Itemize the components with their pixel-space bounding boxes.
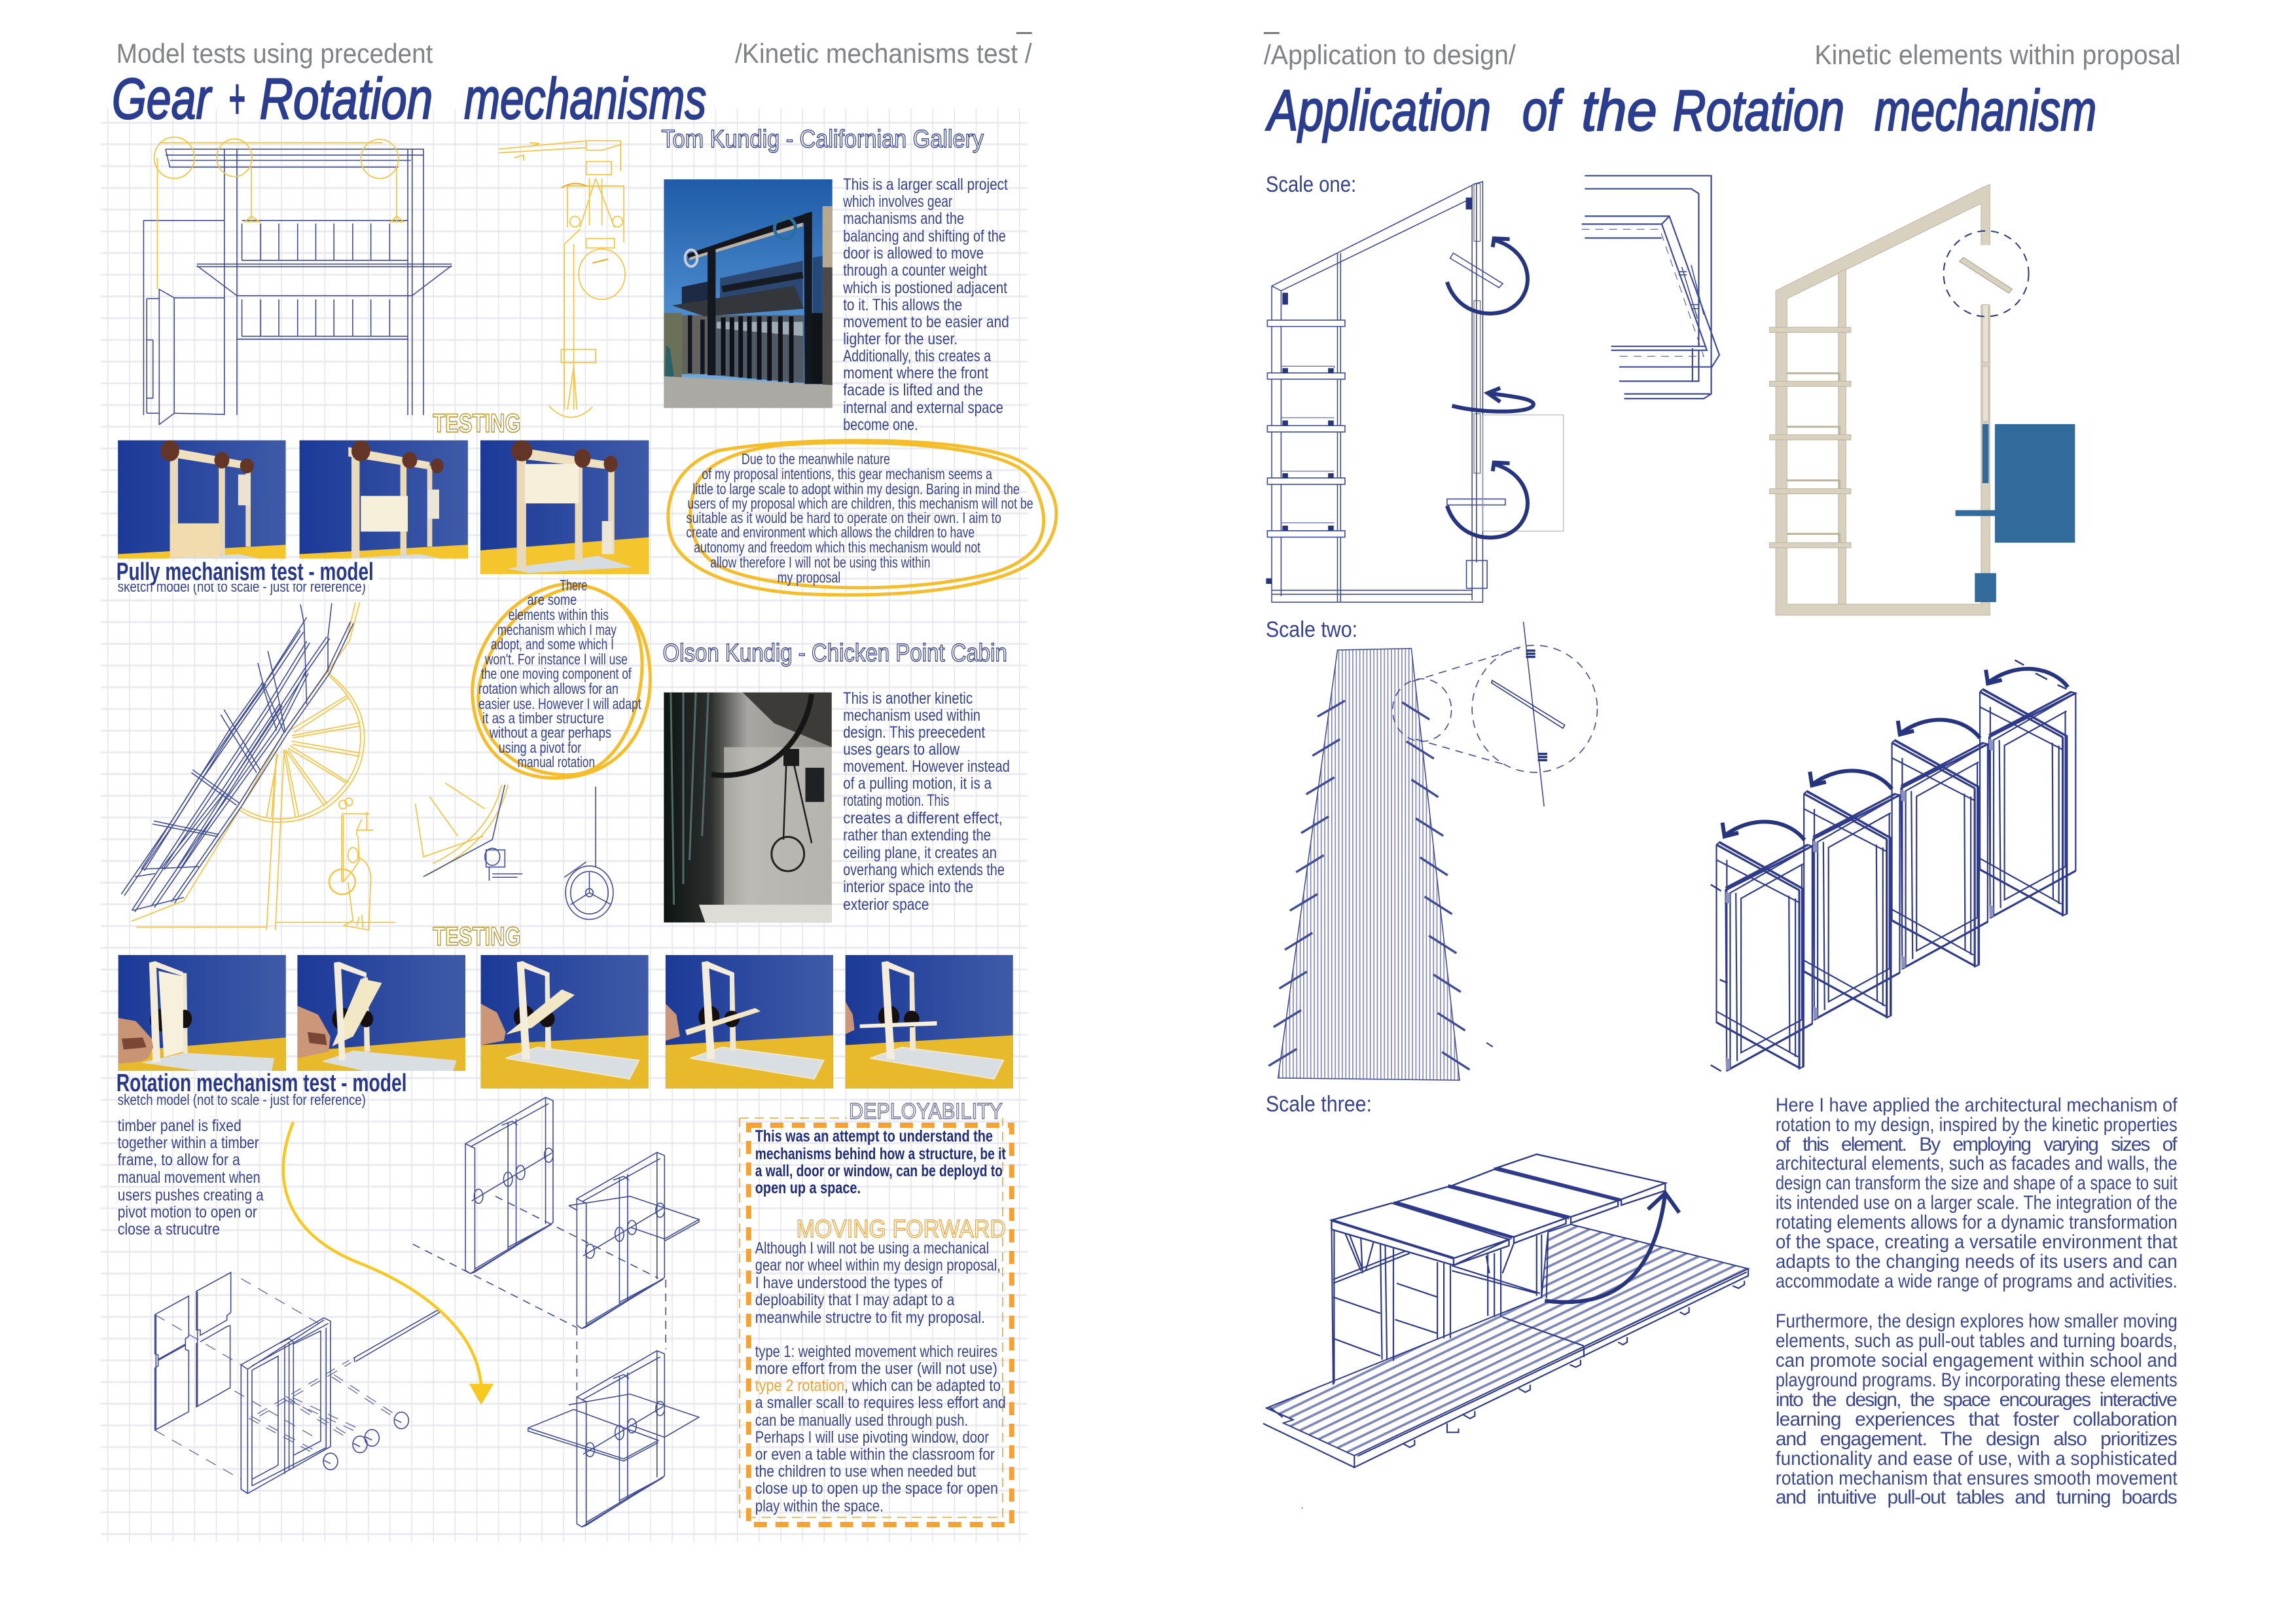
text: moving forward notes: more effort from the user (will not use) (755, 1360, 997, 1378)
text: timber panel note: timber panel is fixed (118, 1117, 242, 1135)
navy lattice (121, 604, 353, 912)
photo: Californian Gallery (664, 179, 833, 408)
title: Application of the Rotation mechanism: of (1522, 79, 1564, 143)
text: Chicken Point Cabin description (843, 689, 1010, 914)
graph paper grid (101, 109, 1028, 1542)
callout: yellow scribble circle with adaptation text: it as a timber structure (482, 710, 604, 727)
text: Tom Kundig description: This is a larger scall project (843, 175, 1008, 194)
text: application paragraph one: architectural elements, such as facades and walls, the (1776, 1153, 2178, 1174)
text: Tom Kundig description: which is postioned adjacent (842, 279, 1007, 297)
text: application paragraph one: its intended use on a larger scale. The integration of the (1776, 1192, 2178, 1214)
drawing: gear detail and wheel (416, 783, 613, 920)
text: application paragraph one: of this element. By employing varying sizes of (1776, 1134, 2178, 1155)
text: Chicken Point Cabin description: of a pulling motion, it is a (843, 774, 992, 793)
drawing: scale one section line work (1266, 182, 1564, 602)
callout: yellow scribble ellipse with reflection: allow therefore I will not be using this within (710, 554, 930, 571)
photo: pulley model 3 (480, 441, 649, 574)
text: Chicken Point Cabin description: interior space into the (843, 878, 973, 896)
screen 3 (1892, 740, 1988, 969)
caption: sketch model note (clipped): sketch model (not to scale - just for reference) (118, 578, 366, 595)
callout: yellow scribble circle with adaptation text: manual rotation (518, 753, 595, 770)
text: application paragraph one: adapts to the changing needs of its users and can (1776, 1251, 2178, 1272)
text: moving forward notes: can be manually used through push. (755, 1411, 968, 1430)
text: Tom Kundig description: moment where the front (843, 364, 988, 382)
dashed projection lines (413, 1197, 666, 1399)
frame: fully open (528, 1351, 699, 1527)
text: moving forward notes: Perhaps I will use pivoting window, door (755, 1428, 989, 1447)
callout: yellow scribble ellipse with reflection: of my proposal intentions, this gear mechanism seems a (702, 465, 992, 482)
title: Gear + Rotation mechanisms: + (228, 67, 245, 131)
text: Chicken Point Cabin description: design. This preecedent (843, 723, 985, 742)
callout: yellow scribble circle with adaptation text: won't. For instance I will use (484, 651, 628, 668)
yellow wheel, person and mechanism (132, 602, 395, 930)
photo: pulley model 2 (300, 441, 468, 558)
text: application paragraph two: and intuitive pull-out tables and turning boards (1776, 1487, 2178, 1508)
label: Scale three: Scale three: (1266, 1092, 1372, 1117)
text: Chicken Point Cabin description: exterior space (843, 895, 929, 914)
text: Tom Kundig description: movement to be easier and (843, 313, 1009, 331)
callout: yellow scribble circle with adaptation text: rotation which allows for an (478, 680, 619, 697)
text: timber panel note: frame, to allow for a (118, 1151, 240, 1169)
deck edge and supports (1263, 1269, 1748, 1468)
text: application paragraph two: elements, such as pull-out tables and turning boards, (1776, 1330, 2178, 1352)
drawing: scale two isometric rotating screens (1711, 660, 2075, 1071)
caption: sketch model note: sketch model (not to scale - just for reference) (118, 1091, 366, 1108)
photo: rotation model 2 (297, 955, 465, 1071)
callout: yellow scribble ellipse with reflection: suitable as it would be hard to operate on their own. I aim to (686, 509, 1001, 526)
text: moving forward notes: close up to open up the space for open (755, 1479, 998, 1498)
text: moving forward notes (755, 1239, 1006, 1515)
caption: Pully mechanism test - model: Pully mechanism test - model (117, 558, 374, 586)
text: moving forward notes: gear nor wheel within my design proposal, (755, 1256, 1001, 1274)
callout: yellow scribble ellipse with reflection: little to large scale to adopt within my design. Baring in mind the (692, 480, 1020, 497)
text: Tom Kundig description: Additionally, this creates a (843, 347, 991, 365)
text: moving forward notes: play within the space. (755, 1497, 884, 1515)
text: moving forward notes: meanwhile structre to fit my proposal. (755, 1308, 985, 1327)
text: Chicken Point Cabin description: mechanism used within (843, 706, 980, 725)
text: timber panel note (118, 1117, 264, 1238)
text: Tom Kundig description: facade is lifted and the (843, 381, 983, 399)
drawing: scale two plan (1268, 622, 1597, 1080)
pivot discs (394, 1412, 408, 1429)
title: Application of the Rotation mechanism: Rotation (1673, 79, 1844, 143)
heading: Tom Kundig - Californian Gallery: Tom Kundig - Californian Gallery (662, 126, 984, 153)
frame: partly open (569, 1153, 699, 1329)
callout: yellow scribble circle with adaptation text: adopt, and some which I (491, 636, 614, 653)
text: deployability summary: mechanisms behind how a structure, be it (755, 1145, 1006, 1163)
label: Scale one: Scale one: (1266, 172, 1356, 197)
dashed axis marks (1711, 660, 2066, 1071)
text: moving forward notes: Although I will not be using a mechanical (755, 1239, 989, 1257)
drawing: coloured section model (1770, 185, 2075, 615)
photo: pulley model 1 (118, 441, 286, 558)
label: TESTING (rotation): TESTING (433, 922, 521, 951)
text: application paragraph two: Furthermore, the design explores how smaller moving (1776, 1310, 2178, 1332)
text: moving forward notes: the children to use when needed but (755, 1462, 976, 1481)
arrow: yellow curved connector (283, 1122, 493, 1405)
rotation arrow (1545, 1193, 1679, 1302)
text: application paragraph two: learning experiences that foster collaboration (1776, 1409, 2178, 1430)
drawing: scale three isometric pavilion (1263, 1154, 1748, 1509)
text: Chicken Point Cabin description: rather than extending the (843, 826, 991, 844)
title: Gear + Rotation mechanisms (112, 67, 706, 131)
header: right page: Kinetic elements within proposal (1815, 39, 2181, 70)
text: application paragraph one: of the space, creating a versatile environment that (1776, 1231, 2178, 1253)
label: Scale two: Scale two: (1266, 617, 1357, 642)
photos: rotation mechanism model (118, 955, 1013, 1089)
text: deployability summary: This was an attempt to understand the (755, 1127, 993, 1146)
drawing: large gear wheel and lattice facade (121, 602, 395, 930)
elevation drawing: pulley facade (143, 137, 452, 425)
structure (1331, 1221, 1548, 1384)
left page (101, 32, 1056, 1542)
text: Chicken Point Cabin description: movement. However instead (843, 757, 1010, 776)
photo: rotation model 5 (846, 955, 1013, 1089)
text: Tom Kundig description: through a counter weight (843, 261, 987, 280)
pivot rod (353, 1310, 440, 1362)
text: application paragraph two: into the design, the space encourages interactive (1776, 1389, 2178, 1411)
text: Tom Kundig description: door is allowed to move (843, 244, 984, 262)
text: Tom Kundig description: balancing and shifting of the (843, 227, 1006, 245)
dashed circle: rotating panel highlight (1943, 231, 2029, 317)
title: Application of the Rotation mechanism (1265, 79, 2096, 143)
arrows: rotation arcs (1447, 238, 1534, 537)
text: application paragraph two: rotation mechanism that ensures smooth movement (1776, 1468, 2178, 1489)
text: deployability summary (755, 1127, 1006, 1197)
callout: yellow scribble circle with adaptation text: elements within this (509, 606, 609, 623)
text: Chicken Point Cabin description: This is another kinetic (843, 689, 973, 708)
label: MOVING FORWARD: MOVING FORWARD (796, 1216, 1006, 1243)
text: Tom Kundig description: machanisms and the (843, 209, 964, 228)
screen 4 (1980, 689, 2075, 918)
text: application paragraph one: Here I have applied the architectural mechanism of (1776, 1094, 2178, 1116)
deck (1266, 1225, 1748, 1456)
text: application paragraph one (1776, 1094, 2178, 1292)
callout: yellow scribble ellipse with reflection: autonomy and freedom which this mechanism would not (694, 539, 981, 556)
title: Gear + Rotation mechanisms: Rotation (260, 67, 433, 131)
photo: rotation model 1 (118, 955, 286, 1071)
text: timber panel note: manual movement when (118, 1168, 260, 1187)
rotation arrows (1723, 669, 2068, 840)
drawing: exploded panel, frame and pivot discs (155, 1272, 440, 1494)
text: application paragraph two: can promote social engagement within school and (1776, 1350, 2178, 1371)
text: Chicken Point Cabin description: uses gears to allow (843, 740, 960, 759)
callout: yellow scribble circle with adaptation text: without a gear perhaps (489, 724, 611, 741)
panel: deployability dashed box (740, 1118, 1012, 1525)
text: Tom Kundig description: which involves gear (842, 192, 952, 211)
screen 1 (1717, 842, 1812, 1071)
text: timber panel note: users pushes creating a (118, 1186, 264, 1204)
label: TESTING (pulley): TESTING (433, 409, 521, 438)
title: Gear + Rotation mechanisms: mechanisms (464, 67, 706, 131)
title: Application of the Rotation mechanism: mechanism (1874, 79, 2096, 143)
text: application paragraph one: rotating elements allows for a dynamic transformation (1776, 1212, 2178, 1233)
text: moving forward notes: , which can be adapted to (844, 1377, 1001, 1395)
text: moving forward notes: I have understood the types of (755, 1274, 942, 1292)
section drawing: yellow gear mechanism (499, 141, 625, 417)
text: application paragraph two: functionality and ease of use, with a sophisticated (1776, 1448, 2178, 1470)
title: Application of the Rotation mechanism: Application (1265, 79, 1491, 143)
timber panels (155, 1272, 231, 1430)
heading: Olson Kundig - Chicken Point Cabin: Olson Kundig - Chicken Point Cabin (663, 640, 1007, 667)
text: Tom Kundig description: lighter for the user. (843, 330, 958, 348)
callout: yellow scribble ellipse with reflection: Due to the meanwhile nature (742, 450, 890, 467)
text: application paragraph two: playground programs. By incorporating these elements (1776, 1369, 2178, 1391)
text: moving forward notes: type 1: weighted movement which reuires (755, 1343, 997, 1361)
callout: yellow scribble circle with adaptation text (473, 577, 650, 778)
right page (1263, 32, 2181, 1509)
header: right page (1264, 32, 2181, 70)
text: timber panel note: pivot motion to open or (118, 1203, 257, 1221)
text: moving forward notes: deploability that I may adapt to a (755, 1291, 954, 1309)
text: Tom Kundig description (842, 175, 1009, 434)
text: application paragraph one: design can transform the size and shape of a space to suit (1776, 1172, 2178, 1194)
title: Gear + Rotation mechanisms: Gear (112, 67, 213, 131)
photo: rotation model 4 (666, 955, 833, 1089)
callout: yellow scribble circle with adaptation text: mechanism which I may (497, 621, 617, 638)
callout: yellow scribble circle with adaptation text: using a pivot for (499, 739, 581, 756)
header: left page (117, 32, 1032, 69)
roof slabs (1331, 1154, 1665, 1265)
callout: yellow scribble circle with adaptation text: There (560, 577, 587, 594)
photo: Chicken Point Cabin (664, 693, 832, 922)
text: application paragraph one: accommodate a wide range of programs and activities. (1776, 1271, 2178, 1292)
text: Chicken Point Cabin description: overhang which extends the (843, 861, 1005, 879)
text: application paragraph one: rotation to my design, inspired by the kinetic properties (1776, 1114, 2178, 1136)
text: timber panel note: together within a timber (118, 1134, 259, 1152)
photos: pulley mechanism model (118, 441, 649, 574)
frame: closed (465, 1098, 553, 1274)
title: Application of the Rotation mechanism: the (1581, 79, 1657, 143)
callout: yellow scribble ellipse with reflection: my proposal (778, 569, 840, 586)
callout: yellow scribble circle with adaptation text: are some (528, 591, 577, 608)
text: deployability summary: a wall, door or window, can be deployd to (755, 1162, 1003, 1180)
screen 2 (1804, 791, 1899, 1020)
header: left page: Model tests using precedent (117, 38, 433, 69)
text: Chicken Point Cabin description: rotating motion. This (843, 791, 949, 810)
callout: yellow scribble circle with adaptation text: easier use. However I will adapt (478, 695, 641, 712)
dashed explode lines (155, 1278, 393, 1479)
text: Tom Kundig description: to it. This allows the (843, 296, 962, 314)
header: left page: /Kinetic mechanisms test / (735, 38, 1032, 69)
text: deployability summary: open up a space. (755, 1179, 861, 1197)
text: moving forward notes: a smaller scall to requires less effort and (755, 1394, 1006, 1412)
text: Chicken Point Cabin description: ceiling plane, it creates an (843, 844, 997, 862)
text: moving forward notes: or even a table within the classroom for (755, 1445, 995, 1464)
text: moving forward notes: type 2 rotation (755, 1377, 844, 1395)
timber frame (241, 1318, 331, 1494)
callout: yellow scribble ellipse with reflection (668, 441, 1056, 595)
caption: Rotation mechanism test - model: Rotation mechanism test - model (117, 1070, 407, 1097)
callout: yellow scribble ellipse with reflection: create and environment which allows the children to have (686, 524, 975, 541)
mask behind pulley caption (115, 562, 379, 584)
callout: yellow scribble circle with adaptation text: the one moving component of (481, 665, 632, 682)
text: Chicken Point Cabin description: creates a different effect, (843, 809, 1003, 827)
text: application paragraph two (1776, 1310, 2178, 1508)
drawing: roof joint detail (1582, 175, 1719, 399)
photo: rotation model 3 (481, 955, 649, 1089)
label: DEPLOYABILITY: DEPLOYABILITY (849, 1099, 1003, 1124)
text: Tom Kundig description: internal and external space (843, 399, 1003, 417)
callout: yellow scribble ellipse with reflection: users of my proposal which are children, this mechanism will not be (687, 495, 1033, 512)
header: right page: /Application to design/ (1264, 39, 1516, 70)
drawing: exploded rotating frames (413, 1098, 699, 1527)
text: application paragraph two: and engagement. The design also prioritizes (1776, 1428, 2178, 1450)
text: Tom Kundig description: become one. (843, 416, 918, 434)
text: timber panel note: close a strucutre (118, 1220, 220, 1238)
